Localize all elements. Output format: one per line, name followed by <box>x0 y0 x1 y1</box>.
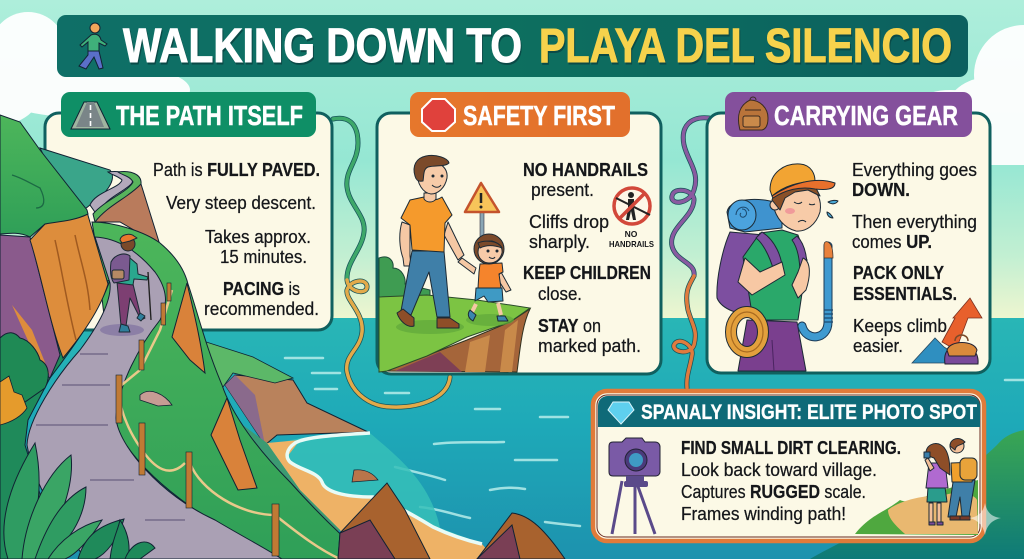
icon: road <box>71 102 110 129</box>
string: green and gold from panel 1 <box>333 118 450 407</box>
panel text: gear advice: ESSENTIALS. <box>853 284 957 304</box>
coastal headland <box>200 340 368 445</box>
fence <box>116 283 340 559</box>
panel text: safety rules: NO HANDRAILS <box>523 160 648 180</box>
rock <box>140 391 172 406</box>
callout text: Captures RUGGED scale. <box>681 482 866 502</box>
icon: no handrails sign: NO <box>625 229 638 239</box>
panel text: gear advice: Then everything <box>852 212 977 232</box>
panel text: path facts: Takes approx. <box>205 227 311 247</box>
panel text: safety rules: STAY on <box>538 316 601 336</box>
title text: WALKING DOWN TO <box>123 20 522 73</box>
illustration: father <box>397 155 464 328</box>
icon: sparkle <box>969 503 1001 535</box>
panel text: path facts: recommended. <box>204 299 319 319</box>
panel text: gear advice: Keeps climb <box>853 316 947 336</box>
illustration: couple taking a photo <box>924 439 977 525</box>
large leaves <box>4 443 155 559</box>
panel text: safety rules: Cliffs drop <box>529 212 609 232</box>
header: the path itself <box>61 92 316 137</box>
sea <box>0 318 1024 559</box>
icon: diamond <box>608 402 634 424</box>
orange cliff strips <box>172 283 257 490</box>
illustration: bush <box>379 257 430 302</box>
landscape: right green hill <box>810 430 1024 559</box>
panel: the path itself <box>45 113 332 330</box>
panel text: gear advice: Everything goes <box>852 160 977 180</box>
icon: no handrails sign: HANDRAILS <box>609 239 654 249</box>
orange bush <box>0 376 27 425</box>
green hilltop <box>0 115 88 237</box>
panel text: safety rules: sharply. <box>529 232 590 252</box>
illustration: cliff edge <box>379 295 530 372</box>
panel text: safety rules: close. <box>538 284 582 304</box>
panel text: path facts: Very steep descent. <box>166 193 316 213</box>
callout text: Frames winding path! <box>681 504 846 524</box>
panel text: gear advice: comes UP. <box>852 232 932 252</box>
left ground strip <box>0 280 110 559</box>
bush <box>0 333 48 408</box>
icon: snorkel <box>802 242 833 337</box>
panel text: path facts: PACING is <box>223 279 300 299</box>
far road <box>90 172 132 215</box>
hiker on the path <box>110 234 151 332</box>
panel text: gear advice <box>852 160 977 356</box>
icon: walking figure <box>79 23 107 69</box>
callout: elite photo spot <box>593 391 1001 541</box>
panel: carrying gear <box>707 113 990 373</box>
foreground rocks <box>338 483 565 559</box>
callout header <box>598 396 980 427</box>
main road <box>27 237 282 559</box>
landscape: left coastal cliffs and path <box>0 115 565 559</box>
panel: safety first <box>377 113 661 374</box>
panel text: path facts: Path is FULLY PAVED. <box>153 160 320 180</box>
panel text: gear advice: easier. <box>853 336 903 356</box>
panel text: gear advice: DOWN. <box>852 180 910 200</box>
illustration: dirt clearing <box>855 480 978 535</box>
cliff face <box>0 235 60 378</box>
beach and surf <box>267 433 495 559</box>
right green slope <box>92 222 368 559</box>
icon: up arrow over slope and bag <box>912 298 982 364</box>
background sky <box>0 0 1024 320</box>
illustration: tired hiker <box>717 164 838 371</box>
heading text: SAFETY FIRST <box>463 100 615 131</box>
icon: warning sign <box>465 183 499 238</box>
callout text: FIND SMALL DIRT CLEARING. <box>681 438 901 458</box>
title bar <box>57 15 968 77</box>
panel text: safety rules: KEEP CHILDREN <box>523 263 651 283</box>
cloud left <box>0 12 190 125</box>
header: safety first <box>410 92 630 137</box>
far teal hill <box>40 148 112 213</box>
illustration: child <box>458 234 511 321</box>
sage band under headland <box>236 420 340 535</box>
wave highlights <box>285 358 1024 526</box>
header: carrying gear <box>725 92 972 137</box>
cloud right <box>900 25 1024 165</box>
panel text: gear advice: PACK ONLY <box>853 263 944 283</box>
heading text: THE PATH ITSELF <box>116 100 303 131</box>
panel text: safety rules <box>523 160 651 356</box>
panel text: path facts <box>153 160 320 319</box>
title text <box>123 20 952 73</box>
string: purple and orange from panel 3 <box>672 118 709 388</box>
far brown cliff <box>95 184 160 245</box>
panel text: safety rules: present. <box>531 180 594 200</box>
callout text <box>681 438 901 524</box>
icon: backpack <box>738 97 768 130</box>
icon: stop sign <box>422 99 455 131</box>
heading text: CARRYING GEAR <box>774 100 958 131</box>
panel text: safety rules: marked path. <box>538 336 641 356</box>
callout text: Look back toward village. <box>681 460 877 480</box>
icon: camera on tripod <box>609 438 660 534</box>
icon: no handrails sign <box>609 188 654 249</box>
panel text: path facts: 15 minutes. <box>220 247 307 267</box>
